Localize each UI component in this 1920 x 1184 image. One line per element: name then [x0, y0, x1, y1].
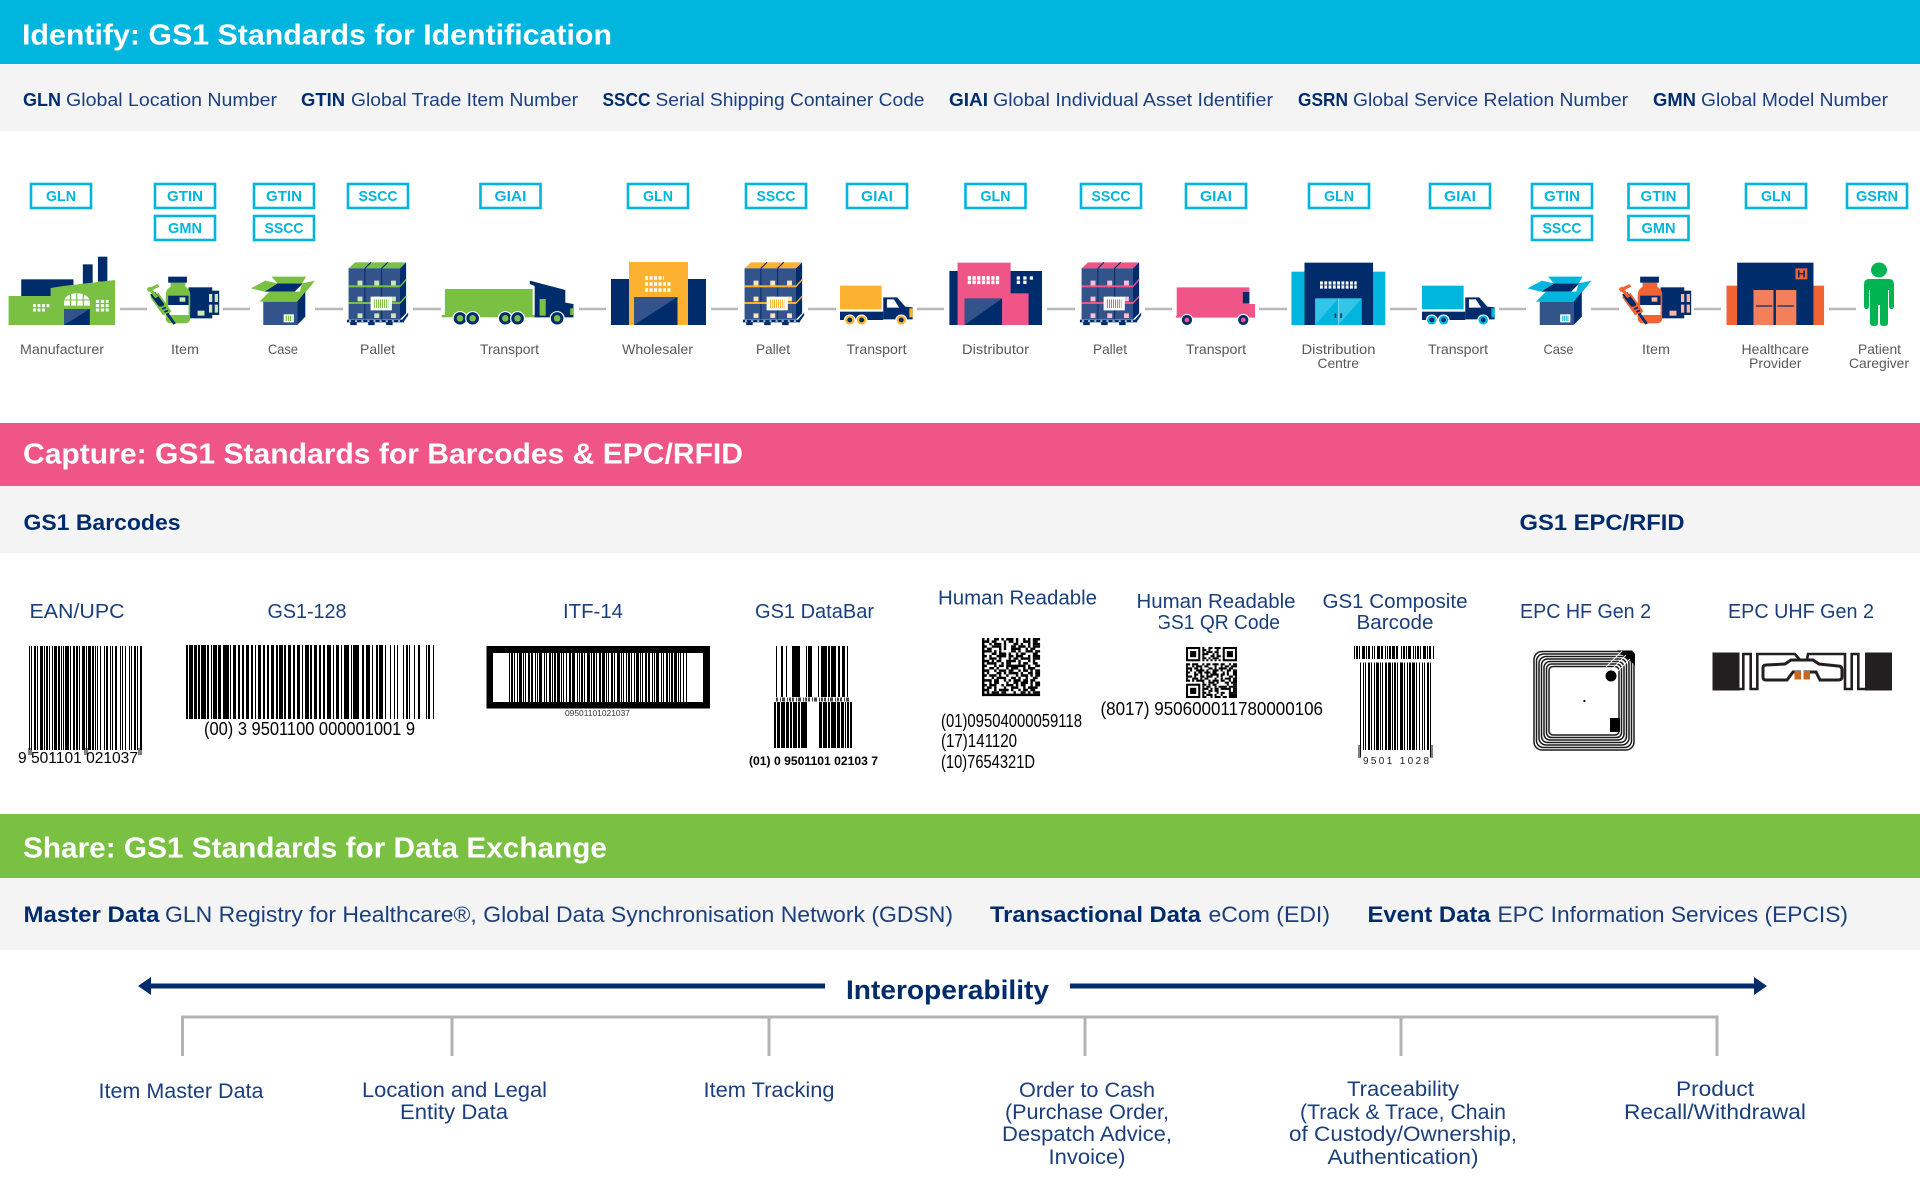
- identifier tags row: GIAI: [1200, 188, 1232, 205]
- icon labels: Pallet: [360, 341, 395, 357]
- barcode: GS1-128: (00) 3 9501100 000001001 9: [204, 719, 415, 739]
- icon: manufacturer factory: [9, 257, 115, 325]
- icon labels: Pallet: [1093, 341, 1127, 357]
- barcode: GS1 composite: [1322, 591, 1468, 767]
- barcode: EAN/UPC: EAN/UPC: [30, 601, 124, 623]
- icon labels: Transport: [1186, 341, 1246, 357]
- icon labels: Item: [1642, 341, 1670, 357]
- panel: data exchange standards: Transactional Data: [990, 902, 1202, 927]
- use case: item tracking: Item Tracking: [704, 1079, 834, 1102]
- panel: identifier legend: [0, 64, 1920, 131]
- panel: data exchange standards: eCom (EDI): [1208, 902, 1330, 927]
- icon labels: Caregiver: [1849, 355, 1909, 371]
- panel: identifier legend: GIAI: [949, 90, 988, 110]
- band: capture heading: Capture: GS1 Standards for Barcodes & EPC/RFID: [23, 438, 743, 470]
- icon labels: Transport: [1428, 341, 1488, 357]
- barcode: human readable data matrix: (17)141120: [941, 731, 1017, 751]
- barcode: GS1 DataBar: [749, 601, 878, 768]
- use case: traceability: Authentication): [1328, 1146, 1478, 1169]
- band: share heading: [0, 814, 1920, 878]
- icon: case green: [251, 277, 315, 325]
- panel: capture subheadings: [0, 486, 1920, 553]
- barcode: EAN/UPC: 9 501101 021037: [18, 750, 138, 767]
- panel: data exchange standards: GLN Registry for Healthcare®, Global Data Synchronisation Network (GDSN): [165, 902, 953, 927]
- band: share heading: Share: GS1 Standards for Data Exchange: [23, 832, 607, 864]
- identifier tags row: GTIN: [167, 188, 203, 205]
- icon labels: [20, 341, 1909, 371]
- icon labels: Pallet: [756, 341, 790, 357]
- use case: traceability: of Custody/Ownership,: [1289, 1123, 1517, 1146]
- use case: location and legal entity data: Entity Data: [400, 1101, 508, 1124]
- use case: location and legal entity data: [362, 1079, 547, 1124]
- icon labels: Healthcare: [1742, 341, 1809, 357]
- barcode: GS1 DataBar: (01) 0 9501101 02103 7: [749, 754, 878, 768]
- use case: product recall: Recall/Withdrawal: [1624, 1101, 1806, 1124]
- panel: identifier legend: Global Location Number: [66, 90, 277, 110]
- RFID: EPC UHF Gen 2 antenna: EPC UHF Gen 2: [1728, 601, 1874, 623]
- barcode: human readable data matrix: (10)7654321D: [941, 752, 1035, 772]
- barcode: human readable GS1 QR code: [1100, 591, 1323, 719]
- panel: identifier legend: Global Trade Item Number: [351, 90, 578, 110]
- panel: identifier legend: SSCC: [602, 90, 650, 110]
- icon labels: Item: [171, 341, 199, 357]
- barcode: human readable data matrix: Human Readable: [938, 588, 1097, 610]
- identifier tags row: GSRN: [1856, 188, 1898, 205]
- panel: identifier legend: GLN: [23, 90, 61, 110]
- icon labels: Wholesaler: [622, 341, 693, 357]
- icon: case blue: [1528, 277, 1592, 325]
- icon labels: Transport: [846, 341, 907, 357]
- barcode: GS1 composite: 9501 1028: [1363, 756, 1429, 767]
- use case: traceability: [1289, 1078, 1517, 1169]
- bracket: use-case connectors: [182, 1017, 1717, 1056]
- panel: identifier legend: GMN: [1653, 90, 1696, 110]
- icon: distribution centre building: [1291, 263, 1385, 325]
- icon labels: Centre: [1318, 355, 1359, 371]
- icon: wholesaler building: [611, 262, 706, 325]
- icon: pallet orange: [743, 262, 804, 324]
- icon: transport van pink: [1176, 287, 1255, 326]
- icon: transport truck green: [442, 281, 574, 325]
- panel: capture subheadings: GS1 EPC/RFID: [1520, 510, 1684, 535]
- identifier tags row: SSCC: [358, 188, 398, 205]
- icon labels: Distributor: [962, 341, 1029, 357]
- use case: product recall: [1624, 1078, 1806, 1124]
- barcode: human readable data matrix: (01)09504000059118: [941, 711, 1082, 731]
- icon: transport truck blue: [1422, 286, 1495, 325]
- barcode: human readable GS1 QR code: Human Readable: [1136, 591, 1296, 613]
- identifier tags row: SSCC: [756, 188, 796, 205]
- use case: order to cash: (Purchase Order,: [1005, 1101, 1169, 1124]
- icon: item green: [148, 277, 219, 324]
- identifier tags row: GLN: [1324, 188, 1354, 205]
- icon: healthcare provider hospital: [1727, 263, 1824, 325]
- barcode: ITF-14: ITF-14: [563, 601, 623, 623]
- identifier tags row: GTIN: [266, 188, 302, 205]
- icon labels: Distribution: [1302, 341, 1376, 357]
- panel: data exchange standards: EPC Information Services (EPCIS): [1498, 902, 1848, 927]
- band: identify heading: [0, 0, 1920, 64]
- panel: identifier legend: Global Service Relation Number: [1353, 90, 1628, 110]
- identifier tags row: SSCC: [264, 220, 304, 237]
- identifier tags row: GTIN: [1544, 188, 1580, 205]
- icon labels: Patient: [1858, 341, 1901, 357]
- barcode: human readable GS1 QR code: GS1 QR Code: [1156, 612, 1280, 634]
- panel: data exchange standards: [0, 878, 1920, 950]
- panel: identifier legend: Serial Shipping Container Code: [656, 90, 924, 110]
- barcode: GS1 DataBar: GS1 DataBar: [755, 601, 874, 623]
- identifier tags row: GMN: [1642, 220, 1676, 237]
- identifier tags row: GLN: [980, 188, 1010, 205]
- barcode: ITF-14: [486, 601, 710, 718]
- icon labels: Manufacturer: [20, 341, 104, 357]
- identifier tags row: GLN: [46, 188, 76, 205]
- RFID: EPC HF Gen 2 antenna: EPC HF Gen 2: [1520, 601, 1651, 623]
- use case: traceability: (Track & Trace, Chain: [1300, 1101, 1506, 1124]
- icon: pallet pink: [1080, 262, 1141, 324]
- RFID: EPC HF Gen 2 antenna: [1520, 601, 1651, 750]
- identifier tags row: [31, 184, 1907, 240]
- use case: location and legal entity data: Location and Legal: [362, 1079, 547, 1102]
- panel: identifier legend: GSRN: [1298, 90, 1348, 110]
- panel: identifier legend: GTIN: [301, 90, 345, 110]
- identifier tags row: GTIN: [1640, 188, 1676, 205]
- use case: product recall: Product: [1676, 1078, 1754, 1101]
- icon labels: Transport: [480, 341, 539, 357]
- use case: order to cash: Invoice): [1048, 1146, 1126, 1169]
- icon: item orange: [1620, 277, 1691, 324]
- band: capture heading: [0, 423, 1920, 486]
- icon: patient caregiver person: [1864, 262, 1894, 326]
- barcode: GS1-128: [186, 601, 434, 739]
- icon labels: Provider: [1749, 355, 1802, 371]
- icon: transport truck orange: [840, 286, 913, 325]
- identifier tags row: GIAI: [494, 188, 526, 205]
- use case: traceability: Traceability: [1347, 1078, 1460, 1101]
- RFID: EPC UHF Gen 2 antenna: [1712, 601, 1892, 690]
- panel: data exchange standards: Event Data: [1368, 902, 1491, 927]
- identifier tags row: GIAI: [1444, 188, 1476, 205]
- barcode: human readable GS1 QR code: (8017) 950600011780000106: [1100, 699, 1323, 719]
- use case: item master data: Item Master Data: [98, 1080, 264, 1103]
- panel: capture subheadings: GS1 Barcodes: [24, 510, 180, 535]
- arrow: interoperability left: [138, 977, 825, 995]
- use case: order to cash: Order to Cash: [1019, 1079, 1155, 1102]
- barcode: GS1 composite: GS1 Composite: [1322, 591, 1468, 613]
- identifier tags row: SSCC: [1092, 188, 1131, 205]
- use case: order to cash: [1002, 1079, 1172, 1169]
- panel: data exchange standards: Master Data: [24, 902, 160, 927]
- use case: order to cash: Despatch Advice,: [1002, 1123, 1172, 1146]
- heading: interoperability: Interoperability: [846, 975, 1049, 1005]
- identifier tags row: GLN: [1761, 188, 1791, 205]
- barcode: human readable data matrix: [938, 588, 1097, 772]
- barcode: ITF-14: 09501101021037: [565, 708, 630, 718]
- identifier tags row: SSCC: [1542, 220, 1582, 237]
- arrow: interoperability right: [1070, 977, 1767, 995]
- panel: identifier legend: Global Individual Asset Identifier: [993, 90, 1273, 110]
- barcode: GS1 composite: Barcode: [1356, 612, 1434, 634]
- barcode: GS1-128: GS1-128: [268, 601, 346, 623]
- identifier tags row: GLN: [643, 188, 673, 205]
- barcode: EAN/UPC: [18, 601, 142, 767]
- band: identify heading: Identify: GS1 Standards for Identification: [22, 20, 612, 52]
- icon: distributor building: [949, 263, 1042, 325]
- icon labels: Case: [268, 341, 298, 357]
- identifier tags row: GMN: [168, 220, 202, 237]
- panel: identifier legend: Global Model Number: [1701, 90, 1888, 110]
- identifier tags row: GIAI: [861, 188, 893, 205]
- icon: pallet green: [347, 262, 408, 324]
- icon labels: Case: [1544, 341, 1574, 357]
